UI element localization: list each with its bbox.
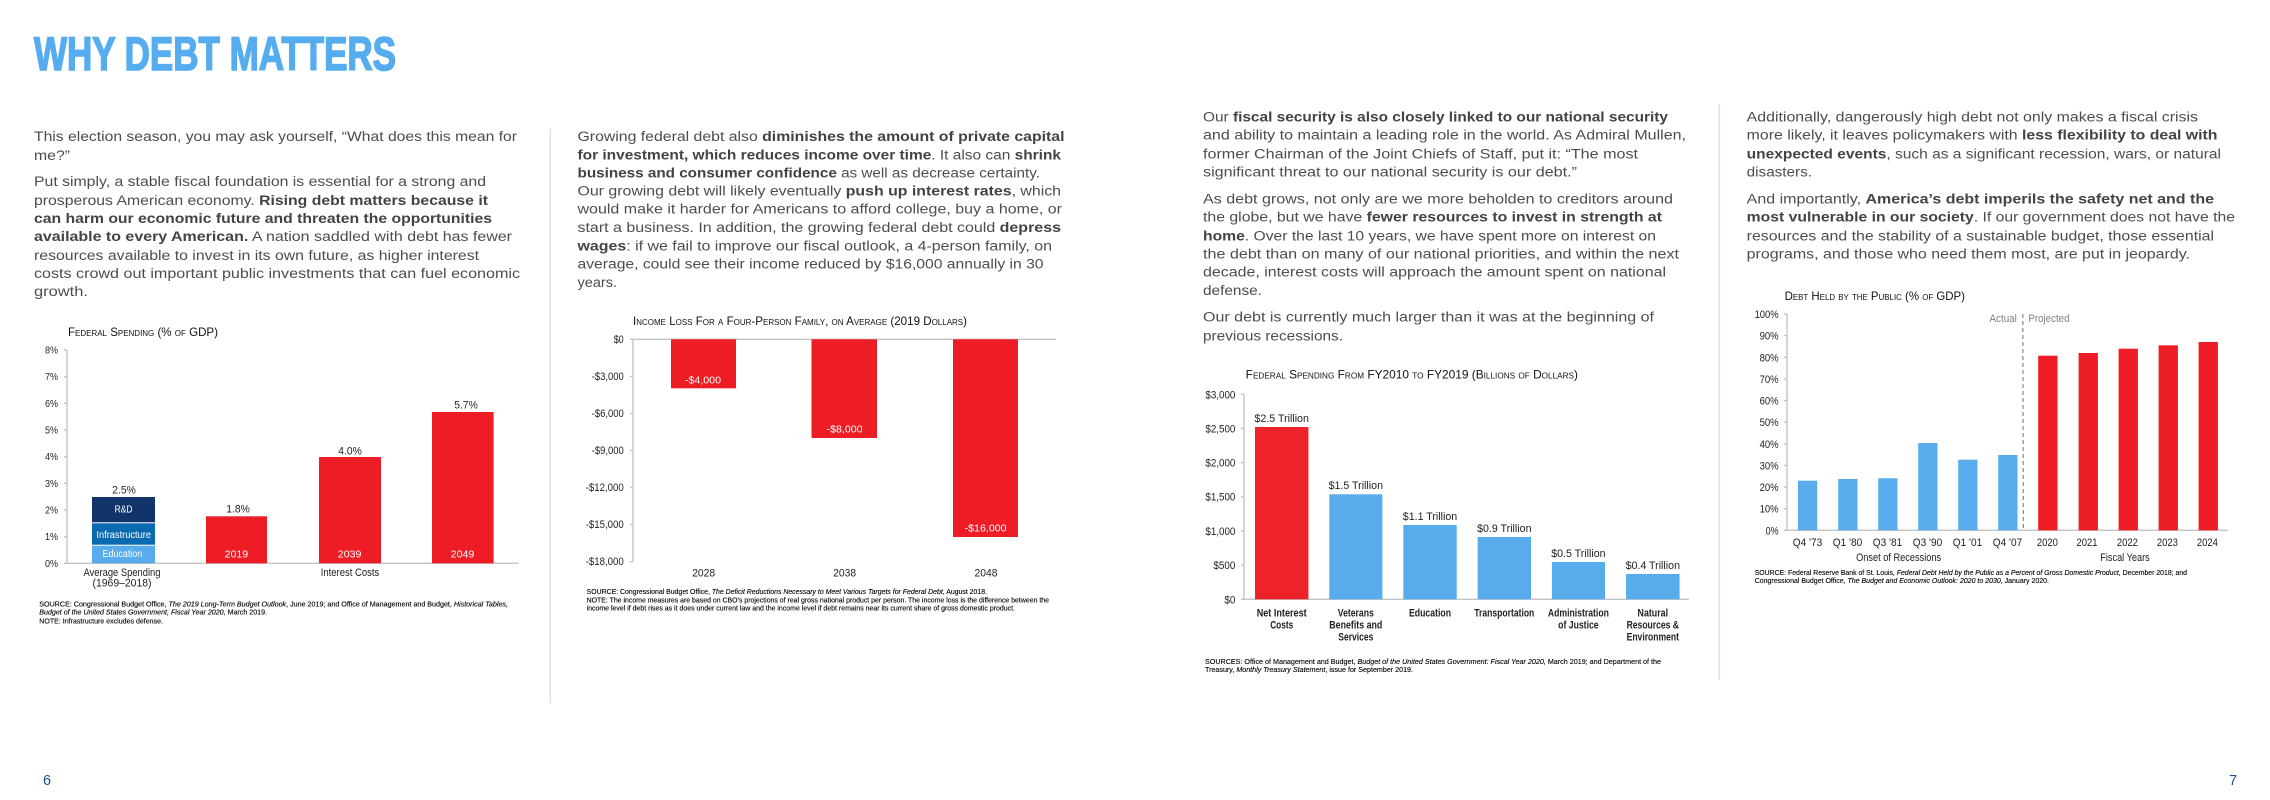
source note: chart 1: Budget of the United States Government, Fiscal Year 2020, March 2019.: [39, 608, 267, 617]
text block: column 2: Our growing debt will likely eventually push up interest rates , which: [578, 184, 1061, 200]
bar: 2048: [953, 339, 1018, 537]
bar: net interest costs: $2.5 Trillion: [1254, 413, 1309, 425]
chart: debt held by the public: 2022: [2117, 537, 2138, 549]
text block: column 1: prosperous American economy. Rising debt matters because it: [34, 193, 488, 209]
chart: federal spending percent of GDP: 1%: [45, 531, 58, 543]
text block: column 2: [576, 129, 1064, 291]
text block: column 3: Our debt is currently much larger than it was at the beginning of: [1203, 310, 1654, 326]
bar: 2028: [671, 339, 736, 388]
text block: column 3: previous recessions.: [1203, 329, 1343, 345]
bar: education: Education: [1409, 608, 1451, 620]
text block: column 2: business and consumer confidence as well as decrease certainty.: [578, 166, 1040, 182]
bars: interest costs: 2039: [338, 549, 362, 561]
chart: debt held by the public: 50%: [1760, 417, 1779, 429]
text block: column 3: the globe, but we have fewer resources to invest in strength at: [1203, 210, 1662, 226]
chart: federal spending percent of GDP: Federal Spending (% of GDP): [68, 326, 218, 339]
bar: veterans benefits: $1.5 Trillion: [1329, 480, 1383, 492]
chart: federal spending percent of GDP: 0%: [45, 558, 58, 570]
bar: net interest costs: Net Interest: [1257, 608, 1307, 620]
title: WHY DEBT MATTERS: [34, 28, 396, 81]
bar: net interest costs: Costs: [1270, 620, 1293, 632]
chart: debt held by the public: Q1 '80: [1833, 537, 1862, 549]
bars: interest costs: 1.8%: [226, 504, 250, 516]
chart: income loss: -$3,000: [592, 371, 624, 383]
chart: debt held by the public: 30%: [1760, 460, 1779, 472]
chart: debt held by the public: 80%: [1760, 352, 1779, 364]
text block: column 1: resources available to invest in its own future, as higher interest: [34, 248, 479, 264]
source note: chart 1: NOTE: Infrastructure excludes defense.: [39, 617, 163, 626]
chart: debt held by the public: Fiscal Years: [2100, 552, 2150, 564]
chart: federal spending percent of GDP: 2%: [45, 504, 58, 516]
stacked bar: average spending: R&D: [115, 504, 133, 516]
chart: federal spending FY2010 to FY2019: $0: [1224, 594, 1235, 606]
chart: income loss: 2028: [692, 568, 715, 580]
chart: debt held by the public: 2021: [2076, 537, 2098, 549]
actual versus projected marker: [1990, 313, 2070, 530]
text block: column 4: Additionally, dangerously high debt not only makes a fiscal crisis: [1747, 110, 2198, 126]
chart: federal spending FY2010 to FY2019: $3,000: [1205, 389, 1235, 401]
text block: column 3: significant threat to our national security is our debt.”: [1203, 165, 1577, 181]
bar: 2038: -$8,000: [827, 424, 863, 436]
chart: debt held by the public: 100%: [1755, 309, 1779, 321]
divider: [1718, 104, 1720, 680]
text block: column 2: would make it harder for Americans to afford college, buy a home, or: [576, 202, 1062, 218]
stacked bar: average spending: [92, 485, 155, 563]
chart: federal spending FY2010 to FY2019: [1205, 368, 1689, 674]
chart: federal spending FY2010 to FY2019: $1,000: [1205, 526, 1235, 538]
chart: debt held by the public: Q3 '81: [1873, 537, 1902, 549]
page number: left: 6: [43, 773, 51, 789]
chart: debt held by the public: 90%: [1760, 330, 1779, 342]
chart: debt held by the public: 2020: [2037, 537, 2058, 549]
chart: debt held by the public: 10%: [1760, 504, 1779, 516]
text block: column 3: defense.: [1203, 283, 1262, 299]
text block: column 3: former Chairman of the Joint Chiefs of Staff, put it: “The most: [1203, 146, 1638, 162]
text block: column 2: years.: [578, 275, 617, 291]
source note: chart 1: SOURCE: Congressional Budget Office, The 2019 Long-Term Budget Outlook, June 2019; and Office of Management and Budget, Historical Tables,: [39, 600, 508, 609]
bar: transportation: [1474, 523, 1535, 620]
chart: debt held by the public: 2023: [2157, 537, 2178, 549]
chart: federal spending percent of GDP: Average Spending: [84, 567, 160, 579]
text block: column 3: As debt grows, not only are we more beholden to creditors around: [1203, 191, 1673, 207]
bar: transportation: Transportation: [1474, 608, 1535, 620]
source note: chart 3: [1205, 657, 1661, 674]
chart: federal spending percent of GDP: 3%: [45, 478, 58, 490]
chart: income loss: $0: [614, 334, 624, 346]
bar: administration of justice: $0.5 Trillion: [1551, 548, 1606, 560]
text block: column 1: [34, 129, 520, 300]
bar: veterans benefits: Veterans: [1338, 608, 1374, 620]
source note: chart 2: [587, 587, 1049, 613]
chart: income loss: -$18,000: [586, 556, 624, 568]
chart: federal spending FY2010 to FY2019: $500: [1213, 560, 1235, 572]
chart: income loss: -$15,000: [586, 519, 624, 531]
bars: interest costs: 2019: [225, 549, 248, 561]
bar: transportation: $0.9 Trillion: [1477, 523, 1532, 535]
bar: natural resources and environment: Environment: [1627, 632, 1679, 644]
chart: federal spending percent of GDP: [39, 326, 519, 626]
chart: federal spending FY2010 to FY2019: $2,500: [1205, 423, 1235, 435]
bar: natural resources and environment: Resources &: [1627, 620, 1679, 632]
chart: federal spending percent of GDP: (1969–2018): [92, 578, 152, 590]
bars: interest costs: 4.0%: [338, 446, 362, 458]
chart: debt held by the public: 70%: [1760, 374, 1779, 386]
text block: column 3: and ability to maintain a leading role in the world. As Admiral Mullen,: [1203, 128, 1686, 144]
chart: income loss: Income Loss For a Four-Person Family, on Average (2019 Dollars): [633, 315, 967, 328]
chart: debt held by the public: Q3 '90: [1913, 537, 1942, 549]
source note: chart 3: SOURCES: Office of Management and Budget, Budget of the United States Government: Fiscal Year 2020, March 2019; and Department of the: [1205, 657, 1661, 666]
source note: chart 3: Treasury, Monthly Treasury Statement, issue for September 2019.: [1205, 665, 1413, 674]
text block: column 1: can harm our economic future and threaten the opportunities: [34, 211, 492, 227]
bar: veterans benefits: [1329, 480, 1383, 644]
text block: column 1: available to every American. A nation saddled with debt has fewer: [34, 229, 512, 245]
chart: income loss: 2048: [974, 568, 998, 580]
chart: debt held by the public: 60%: [1760, 396, 1779, 408]
bar: 2038: [812, 339, 877, 438]
bars: interest costs: 2049: [451, 549, 474, 561]
chart: income loss: -$6,000: [592, 408, 624, 420]
text block: column 2: Growing federal debt also diminishes the amount of private capital: [578, 129, 1064, 145]
chart: debt held by the public: [1755, 290, 2228, 585]
text block: column 4: unexpected events , such as a significant recession, wars, or natural: [1747, 146, 2221, 162]
bar: veterans benefits: Benefits and: [1329, 620, 1382, 632]
text block: column 3: decade, interest costs will approach the amount spent on national: [1203, 265, 1666, 281]
text block: column 1: Put simply, a stable fiscal foundation is essential for a strong and: [34, 174, 486, 190]
source note: chart 4: Congressional Budget Office, The Budget and Economic Outlook: 2020 to 2030, January 2020.: [1755, 576, 2049, 585]
bars: interest costs: [206, 400, 494, 563]
chart: debt held by the public: Debt Held by the Public (% of GDP): [1785, 290, 1965, 303]
source note: chart 1: [39, 600, 508, 626]
bar: 2048: -$16,000: [965, 523, 1007, 535]
bar: administration of justice: [1548, 548, 1609, 632]
chart: debt held by the public: Onset of Recessions: [1856, 552, 1942, 564]
bar: education: $1.1 Trillion: [1403, 511, 1457, 523]
text block: column 3: Our fiscal security is also closely linked to our national security: [1203, 110, 1668, 126]
text block: column 4: programs, and those who need them most, are put in jeopardy.: [1747, 247, 2190, 263]
bar: net interest costs: [1254, 413, 1309, 632]
chart: debt held by the public: 20%: [1760, 482, 1779, 494]
actual versus projected marker: Actual: [1990, 313, 2017, 325]
bars: fiscal years: [2038, 342, 2218, 530]
chart: federal spending percent of GDP: 6%: [45, 398, 58, 410]
text block: column 4: And importantly, America’s debt imperils the safety net and the: [1747, 191, 2214, 207]
text block: column 2: average, could see their income reduced by $16,000 annually in 30: [578, 257, 1044, 273]
text block: column 4: disasters.: [1747, 165, 1812, 181]
chart: debt held by the public: Q1 '01: [1953, 537, 1982, 549]
chart: income loss: -$12,000: [586, 482, 624, 494]
chart: federal spending FY2010 to FY2019: Federal Spending From FY2010 to FY2019 (Billions of Dollars): [1246, 368, 1578, 381]
chart: income loss: [586, 315, 1056, 613]
bars: interest costs: 5.7%: [454, 400, 478, 412]
text block: column 3: [1203, 110, 1686, 345]
bars: onset of recessions: [1798, 443, 2018, 530]
bar: veterans benefits: Services: [1338, 632, 1373, 644]
chart: income loss: 2038: [833, 568, 856, 580]
bar: administration of justice: Administration: [1548, 608, 1609, 620]
bar: natural resources and environment: Natural: [1638, 608, 1668, 620]
chart: income loss: -$9,000: [592, 445, 624, 457]
source note: chart 2: NOTE: The income measures are based on CBO’s projections of real gross national product per person. The income loss is the difference between the: [587, 596, 1049, 605]
chart: debt held by the public: 40%: [1760, 439, 1779, 451]
text block: column 4: most vulnerable in our society . If our government does not have the: [1747, 210, 2235, 226]
chart: federal spending FY2010 to FY2019: $2,000: [1205, 458, 1235, 470]
text block: column 1: me?”: [34, 148, 70, 164]
chart: debt held by the public: Q4 '07: [1993, 537, 2022, 549]
chart: federal spending percent of GDP: 7%: [45, 371, 58, 383]
chart: debt held by the public: Q4 '73: [1793, 537, 1822, 549]
page number: right: 7: [2229, 773, 2237, 789]
source note: chart 2: income level if debt rises as it does under current law and the income level if debt remains near its current share of gross domestic product.: [587, 604, 1015, 613]
text block: column 2: start a business. In addition, the growing federal debt could depress: [578, 220, 1061, 236]
text block: column 1: costs crowd out important public investments that can fuel economic: [34, 266, 520, 282]
text block: column 1: growth.: [34, 284, 88, 300]
bar: natural resources and environment: $0.4 Trillion: [1626, 560, 1680, 572]
bar: 2028: -$4,000: [685, 375, 721, 387]
bar: natural resources and environment: [1626, 560, 1680, 644]
chart: federal spending percent of GDP: 8%: [45, 344, 58, 356]
chart: federal spending percent of GDP: 5%: [45, 424, 58, 436]
text block: column 1: This election season, you may ask yourself, “What does this mean for: [34, 129, 517, 145]
stacked bar: average spending: Infrastructure: [96, 529, 151, 541]
actual versus projected marker: Projected: [2028, 313, 2070, 325]
chart: debt held by the public: 0%: [1766, 525, 1779, 537]
chart: federal spending percent of GDP: 4%: [45, 451, 58, 463]
chart: debt held by the public: 2024: [2197, 537, 2218, 549]
text block: column 3: home . Over the last 10 years, we have spent more on interest on: [1203, 229, 1656, 245]
text block: column 2: for investment, which reduces income over time . It also can shrink: [578, 147, 1061, 163]
chart: federal spending FY2010 to FY2019: $1,500: [1205, 492, 1235, 504]
stacked bar: average spending: Education: [103, 548, 142, 560]
source note: chart 2: SOURCE: Congressional Budget Office, The Deficit Reductions Necessary to Meet Various Targets for Federal Debt, August 2018.: [587, 587, 987, 596]
text block: column 4: [1747, 110, 2235, 263]
bar: administration of justice: of Justice: [1558, 620, 1599, 632]
divider: [550, 129, 551, 703]
text block: column 4: more likely, it leaves policymakers with less flexibility to deal with: [1747, 128, 2218, 144]
source note: chart 4: SOURCE: Federal Reserve Bank of St. Louis, Federal Debt Held by the Public as a Percent of Gross Domestic Product, December 2018; and: [1755, 568, 2187, 577]
text block: column 2: wages : if we fail to improve our fiscal outlook, a 4-person family, on: [576, 239, 1052, 255]
text block: column 3: the debt than on many of our national priorities, and within the next: [1203, 247, 1679, 263]
stacked bar: average spending: 2.5%: [112, 485, 136, 497]
chart: federal spending percent of GDP: Interest Costs: [321, 567, 380, 579]
text block: column 4: resources and the stability of a sustainable budget, those essential: [1747, 229, 2214, 245]
bar: education: [1403, 511, 1457, 620]
source note: chart 4: [1755, 568, 2187, 585]
